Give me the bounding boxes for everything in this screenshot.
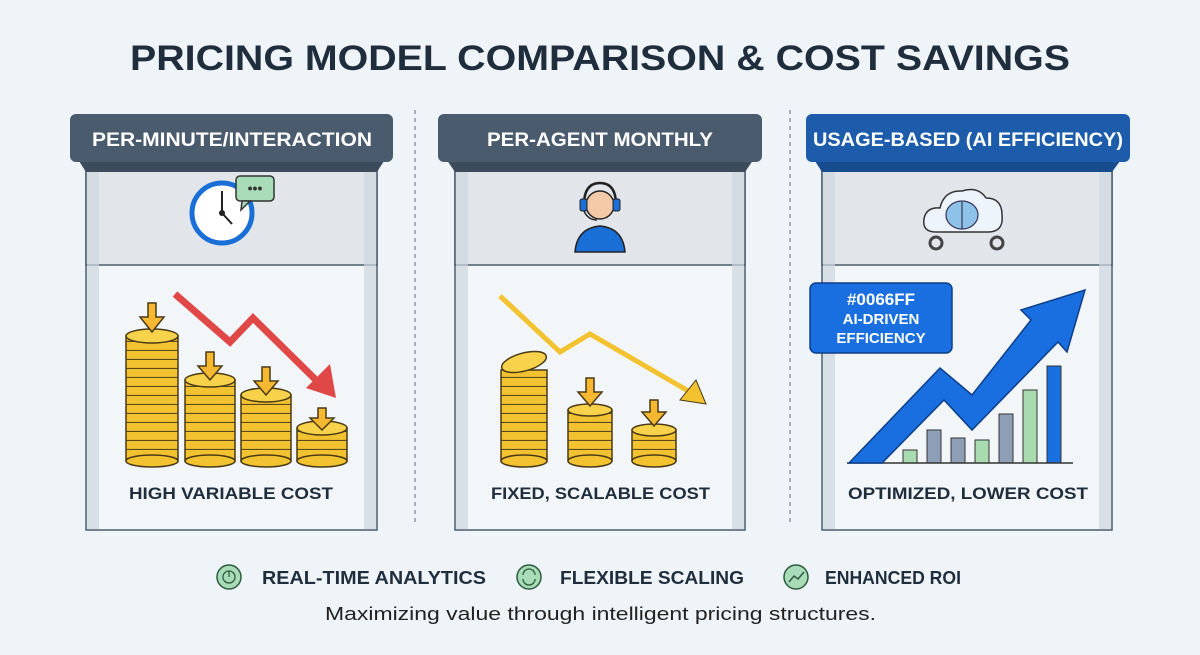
icon: clock with chat: •••: [248, 180, 262, 196]
icon: ROI: [784, 565, 808, 589]
legend: features: FLEXIBLE SCALING: [560, 568, 744, 588]
icon: scaling: [517, 565, 541, 589]
legend: features: ENHANCED ROI: [825, 568, 961, 588]
legend: features: REAL-TIME ANALYTICS: [262, 568, 486, 588]
heading: per-minute: PER-MINUTE/INTERACTION: [92, 130, 372, 151]
icon: clock with chat: [192, 176, 274, 243]
heading: per-agent: [438, 114, 762, 172]
heading: per-minute: [70, 114, 393, 172]
legend: features: [217, 565, 961, 589]
title: PRICING MODEL COMPARISON & COST SAVINGS: [130, 39, 1070, 78]
panel: per-minute: [70, 114, 393, 530]
panel: per-agent: [438, 114, 762, 530]
icon: analytics: [217, 565, 241, 589]
callout: AI-driven efficiency: [810, 283, 952, 353]
subtitle: Maximizing value through intelligent pricing structures.: [325, 604, 876, 624]
callout: AI-driven efficiency: #0066FF: [847, 290, 915, 309]
heading: usage-based: USAGE-BASED (AI EFFICIENCY): [813, 130, 1123, 151]
icon: cloud brain: [924, 190, 1003, 249]
arrow: yellow downward trend: [500, 296, 690, 392]
callout: AI-driven efficiency: AI-DRIVEN: [843, 311, 919, 328]
text: optimized lower cost: OPTIMIZED, LOWER COST: [848, 484, 1089, 503]
arrow: red downward trend: [175, 294, 318, 382]
heading: per-agent: PER-AGENT MONTHLY: [487, 130, 713, 151]
heading: usage-based: [806, 114, 1130, 172]
chart: coin stacks: [126, 303, 347, 467]
text: high variable cost: HIGH VARIABLE COST: [129, 484, 334, 503]
icon: agent headset: [575, 183, 625, 252]
chart: coin stacks: [499, 347, 676, 467]
panel: usage-based: [806, 114, 1130, 530]
arrow: blue upward trend: [849, 290, 1085, 463]
chart: bar chart: [847, 366, 1073, 463]
text: fixed scalable cost: FIXED, SCALABLE COST: [491, 484, 711, 503]
callout: AI-driven efficiency: EFFICIENCY: [836, 330, 926, 347]
